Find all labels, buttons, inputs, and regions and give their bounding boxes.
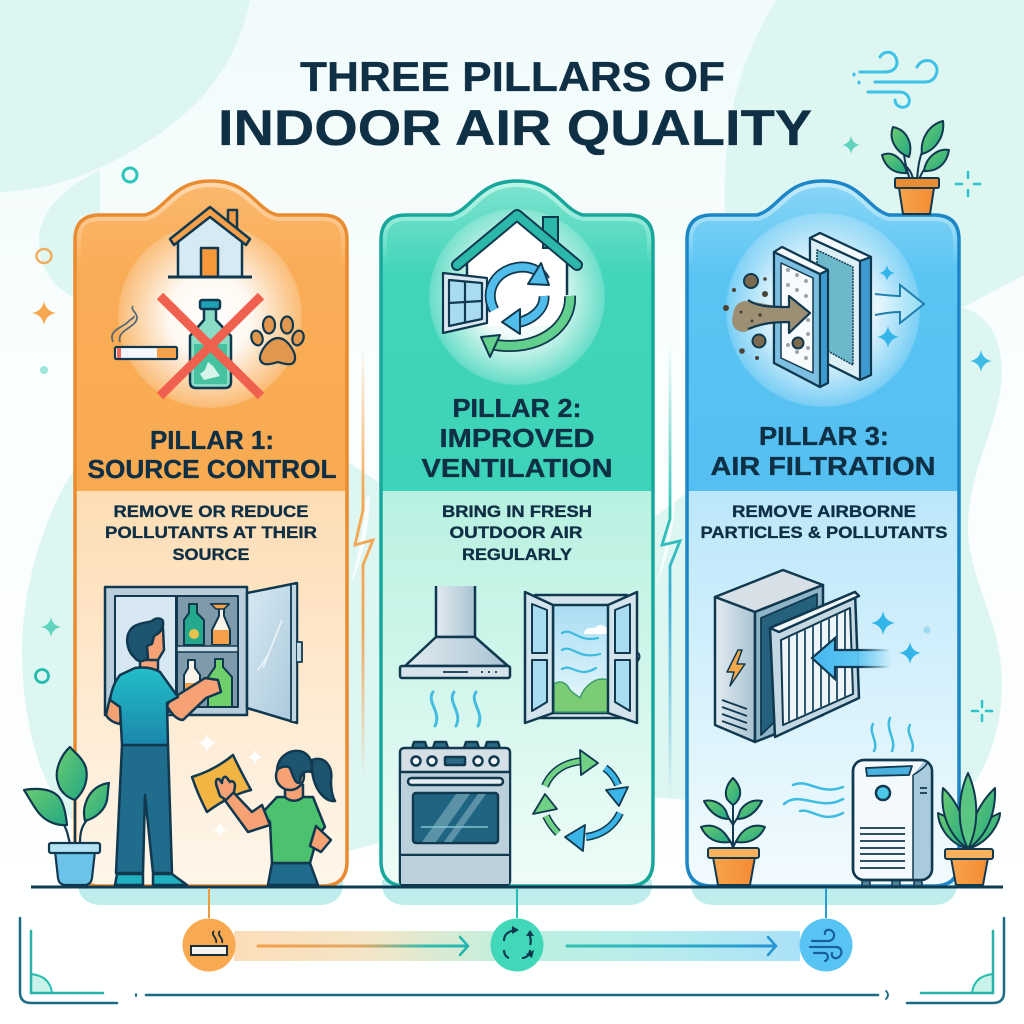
illustration: range hood bbox=[400, 586, 510, 678]
steam and airflow around purifier bbox=[784, 718, 913, 817]
illustration: cabinet with cleaning bottles bbox=[105, 583, 302, 723]
pillar 3 heading bbox=[710, 421, 936, 481]
illustration: air purifier bbox=[853, 760, 932, 886]
sparkles around cloth bbox=[197, 733, 263, 838]
icon: house bbox=[168, 207, 252, 277]
icon: chemical bottle bbox=[190, 300, 231, 388]
pillar 3 description: PARTICLES & POLLUTANTS bbox=[700, 523, 948, 542]
pillar 2 description: REGULARLY bbox=[462, 545, 573, 564]
pillar 2 heading: PILLAR 2: bbox=[452, 393, 582, 423]
sparkles near clean air bbox=[877, 265, 899, 348]
bottom frame right bbox=[907, 918, 1004, 1003]
icon: paw print bbox=[249, 316, 306, 364]
decorative sparkles and rings bbox=[32, 136, 992, 721]
icon: layered air filters bbox=[774, 233, 871, 387]
pillar 1 heading: SOURCE CONTROL bbox=[88, 454, 337, 484]
pillar 1 heading bbox=[88, 425, 337, 484]
pillar 3 description: REMOVE AIRBORNE bbox=[732, 502, 916, 521]
pillar 2 description bbox=[442, 502, 592, 564]
title: INDOOR AIR QUALITY bbox=[218, 100, 812, 156]
icon: cigarette bbox=[112, 306, 177, 359]
lightning connector between pillars 2 and 3 bbox=[662, 345, 680, 800]
icon: pollutant particle arrow bbox=[723, 274, 810, 360]
timeline connectors bbox=[209, 888, 826, 918]
pillar 3 heading: AIR FILTRATION bbox=[710, 451, 936, 481]
pillar 1 heading: PILLAR 1: bbox=[150, 425, 274, 455]
illustration: small plant bbox=[701, 778, 765, 885]
illustration: stove bbox=[400, 742, 510, 885]
illustration: open window with fresh air bbox=[525, 592, 640, 723]
icon: clean air arrow bbox=[875, 285, 924, 323]
bottom frame left bbox=[20, 918, 117, 1003]
panel: improved ventilation bbox=[376, 175, 661, 886]
illustration: potted plant left bbox=[24, 747, 109, 885]
panel: source control bbox=[70, 175, 355, 886]
pillar 3 description bbox=[700, 502, 948, 542]
arrowheads bbox=[481, 263, 549, 357]
pillar 1 description: SOURCE bbox=[172, 545, 250, 564]
sparkles near filter bbox=[871, 611, 930, 664]
icon: ventilated house bbox=[443, 215, 577, 357]
illustration: HVAC filter unit bbox=[715, 570, 859, 742]
window bbox=[443, 273, 487, 333]
pillar 2 description: BRING IN FRESH bbox=[442, 502, 592, 521]
icon: air arrow into filter bbox=[812, 638, 892, 679]
pillar 1 description: POLLUTANTS AT THEIR bbox=[105, 523, 317, 542]
icon: red cross bbox=[160, 296, 261, 396]
panel shadows under the pillars bbox=[78, 880, 957, 905]
floor line bbox=[31, 886, 1003, 888]
decorative plant on pillar 3 bbox=[882, 121, 949, 214]
pillar 3 heading: PILLAR 3: bbox=[759, 421, 889, 451]
circular arrows bbox=[490, 267, 570, 346]
lightning connector between pillars 1 and 2 bbox=[355, 345, 373, 780]
timeline node: cigarette bbox=[182, 918, 236, 972]
illustration: man reaching into cabinet bbox=[106, 618, 221, 885]
panel: air filtration bbox=[682, 175, 967, 886]
icon: wind bbox=[854, 52, 937, 107]
timeline arrow 2 bbox=[567, 937, 776, 955]
illustration: spiky plant bbox=[938, 773, 1000, 885]
icon: air cycle arrows bbox=[533, 750, 628, 851]
timeline node: wind bbox=[800, 918, 852, 972]
pillar 1 description bbox=[105, 502, 317, 564]
timeline arrow 1 bbox=[258, 937, 468, 955]
pillar 2 heading bbox=[422, 393, 612, 483]
pillar 2 heading: VENTILATION bbox=[422, 453, 612, 483]
timeline node: cycle bbox=[490, 918, 544, 972]
pillar 2 description: OUTDOOR AIR bbox=[450, 523, 582, 542]
steam above stove bbox=[431, 692, 480, 726]
illustration: woman wiping with cloth bbox=[192, 751, 335, 885]
title bbox=[218, 53, 812, 156]
bottom divider line bbox=[136, 991, 888, 999]
pillar 1 description: REMOVE OR REDUCE bbox=[114, 502, 308, 521]
pillar 2 heading: IMPROVED bbox=[440, 423, 594, 453]
air waves in window bbox=[562, 632, 600, 672]
title: THREE PILLARS OF bbox=[300, 53, 725, 100]
timeline band bbox=[234, 931, 800, 961]
